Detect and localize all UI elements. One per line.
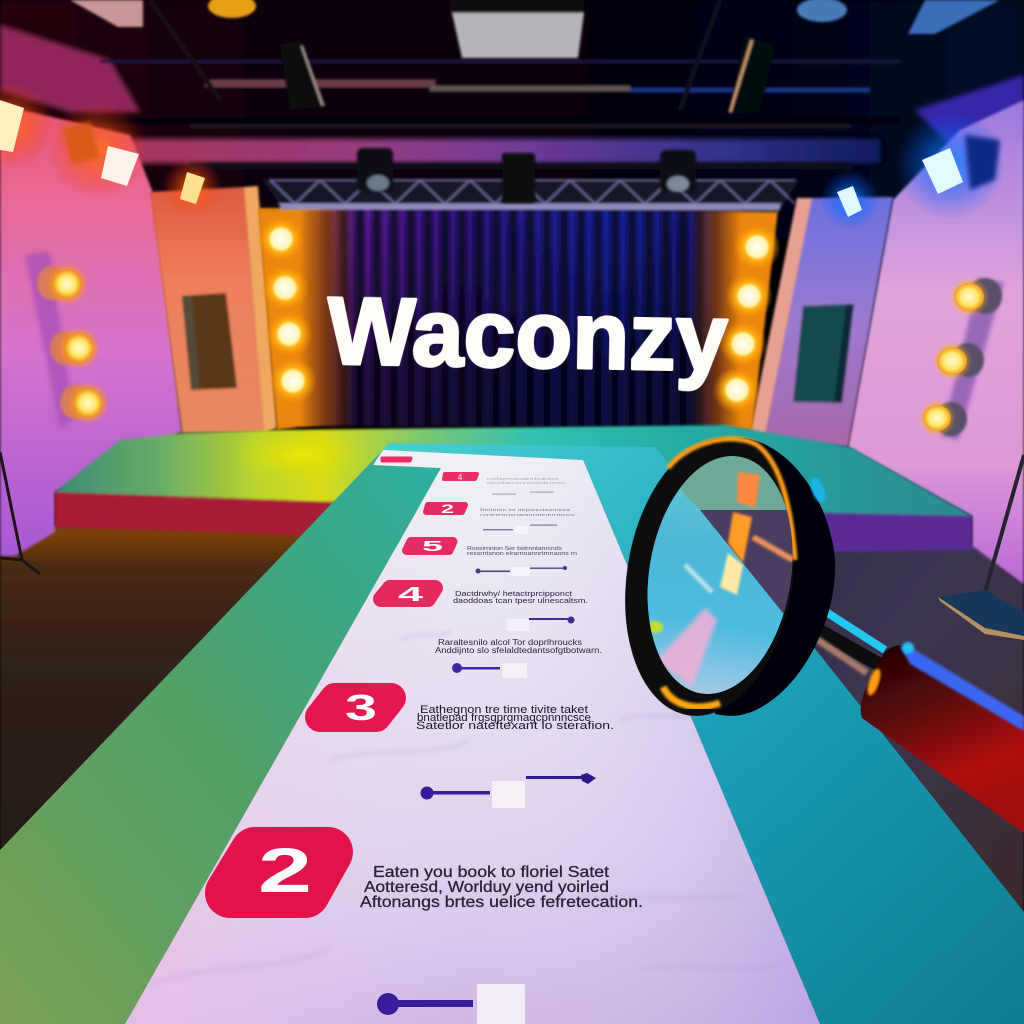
step text row 4: daoddoas tcan tpesr ulnescaltsm. (453, 596, 588, 605)
spotlight: left 1 (0, 100, 24, 152)
spotlight: left 2 (62, 122, 139, 186)
step text far row (480, 507, 576, 517)
step text row 2 (360, 864, 643, 911)
paper strip (125, 450, 820, 1024)
step tag 5 (406, 538, 453, 555)
carpet runner right (383, 443, 1024, 1024)
right wall (848, 100, 1024, 585)
magnifier lens (648, 456, 793, 694)
truss (262, 179, 800, 212)
connector far (483, 524, 557, 534)
step text far row: rontnetrncnarsnrnsnerntrnco (480, 512, 576, 517)
step tag 6 (382, 458, 411, 461)
title: Waconzy: Waconzy (327, 278, 728, 391)
connector bottom (377, 984, 525, 1024)
step text farthest row (487, 477, 565, 485)
spotlight: left 3 (180, 172, 205, 204)
magnifier handle (813, 610, 1024, 833)
step text row 5: Rossirnnion Ser bstrnntanrcnds (467, 546, 563, 552)
ceiling vent (450, 0, 584, 58)
step tag 3 (320, 687, 391, 728)
step text row 3: bnatlepad frgsgprgmagcpnnncsce (417, 712, 591, 724)
stage platform (55, 425, 972, 552)
spotlight: right 2 (837, 186, 862, 217)
wall lamps right (921, 278, 1004, 440)
floor right (700, 510, 1024, 915)
marquee bulbs right (713, 223, 781, 414)
step tag 5 far: 4 (458, 473, 463, 482)
step text row 2: Eaten you book to floriel Satet (373, 864, 610, 881)
orange light panel right (720, 210, 778, 432)
carpet runner left (0, 450, 441, 1024)
step text row 2: Aftonangs brtes uelice fefretecation. (360, 894, 643, 911)
marquee bulbs left (257, 215, 317, 405)
step text far row: Bertoren lor deponrcteonnrea (480, 507, 571, 512)
left column (150, 186, 277, 433)
ceiling fixtures (70, 0, 1000, 114)
step tag 2: 2 (258, 836, 312, 906)
colored spotlight glows (0, 81, 1005, 230)
step text middle row: Raraltesnilo alcol Tor doprlhroucks (438, 638, 582, 647)
step text farthest row: rortsernsoanrtcareor (487, 477, 561, 481)
spotlight: right 1 (922, 135, 1000, 194)
step text middle row (435, 638, 602, 655)
magnifier body (606, 426, 835, 728)
tripod left (0, 452, 40, 574)
step text row 3 (416, 704, 614, 732)
tripod and floor monitor right (938, 455, 1024, 640)
connector farthest (492, 492, 554, 495)
curtain (300, 208, 740, 426)
step text middle row: Anddijnto slo sfelaldtedantsofgtbotwarn. (435, 646, 602, 655)
step text row 3: Satetior nateftexant lo sterafion. (416, 720, 614, 732)
step text row 3: Eathegnon tre time tivite taket (420, 704, 588, 716)
connector row 5 (476, 566, 567, 576)
orange light panel left (258, 208, 320, 430)
right column (750, 197, 893, 447)
step tag 2 far: 2 (441, 502, 455, 516)
step tag 4: 4 (398, 584, 425, 606)
step text row 4: Dactdrwhy/ hetactrprcipponct (455, 589, 573, 598)
left wall (0, 105, 182, 556)
connector row 3 (420, 773, 596, 808)
step text row 5: ressrntsnon elrarnoannrtrnnaons rn (467, 551, 577, 557)
step text row 5 (467, 546, 577, 557)
wall lamps left (25, 252, 106, 428)
step tag 5: 5 (422, 538, 443, 555)
step text farthest row: ronntaorsnrcnentcnren (487, 481, 565, 485)
hanging spotlights (357, 148, 696, 203)
floor left (0, 468, 441, 850)
step tag 2 far (426, 502, 465, 516)
connector row 4 (507, 616, 574, 631)
step tag 4 (381, 584, 435, 606)
step text row 4 (453, 589, 588, 605)
step tag 2 (230, 836, 328, 906)
step tag 5 far (444, 473, 477, 482)
connector middle (452, 663, 527, 678)
background: ceiling and rear wall (0, 0, 1024, 240)
step tag 3: 3 (345, 687, 377, 728)
step text row 2: Aotteresd, Worlduy yend yoirled (364, 879, 609, 896)
